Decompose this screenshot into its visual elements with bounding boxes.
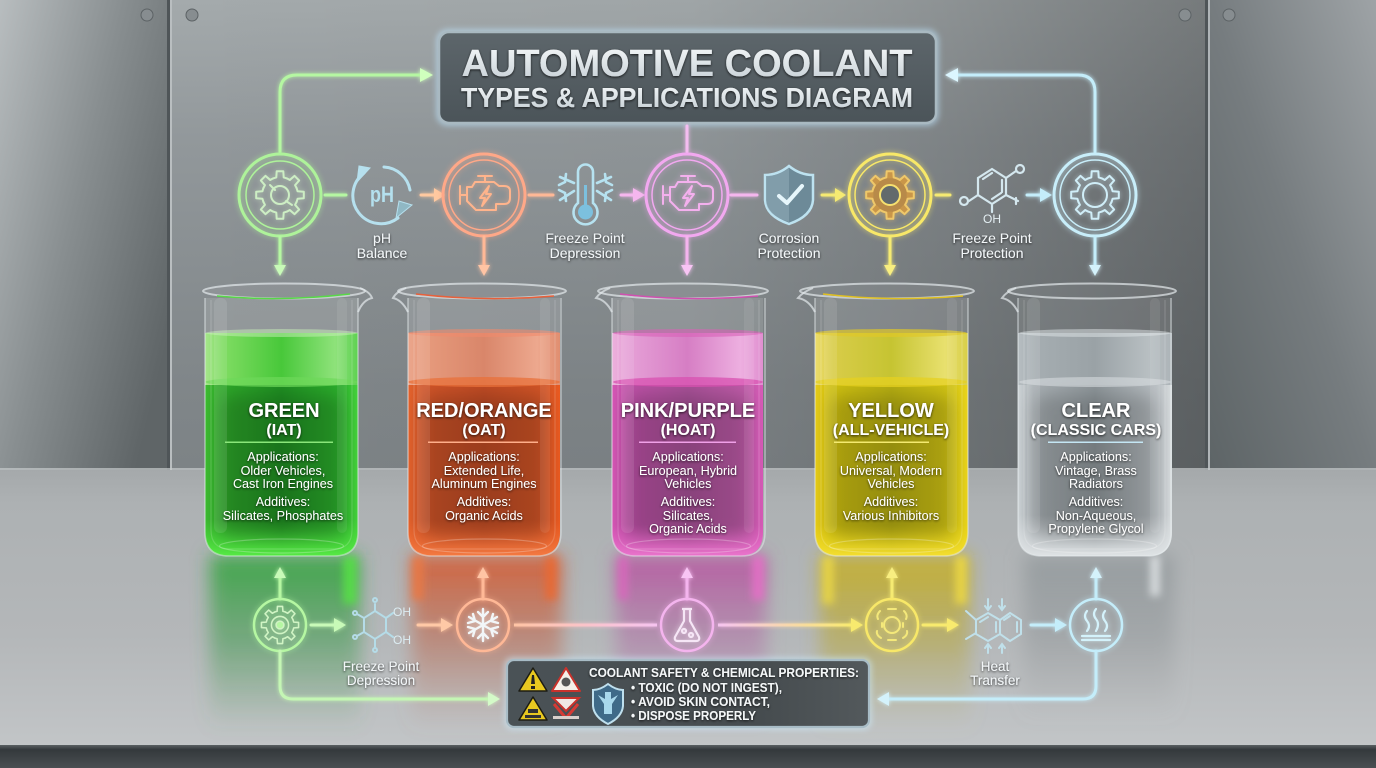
icon: yellow corrosive triangle — [519, 697, 547, 720]
icon: yellow warning exclamation — [519, 668, 547, 691]
label: heat transfer: Transfer — [970, 673, 1020, 688]
lower liquid — [205, 385, 358, 556]
icon: shield with figure — [593, 684, 623, 724]
text: red/orange label: Organic Acids — [445, 509, 523, 523]
label: freeze point depression bottom: Freeze Point — [343, 659, 420, 674]
label: corrosion protection: Corrosion — [759, 230, 819, 246]
text: green label: Cast Iron Engines — [233, 477, 333, 491]
node: bottom green gear — [254, 599, 306, 651]
arrow: yellow to naphthalene — [923, 618, 959, 632]
icon: molecule with OH — [960, 165, 1024, 226]
text: clear label: Non-Aqueous, — [1056, 509, 1136, 523]
arrow: blue node to safety panel — [877, 651, 1096, 706]
arrow: molecule to snowflake — [418, 618, 453, 632]
icon: molecule freeze depression: OH — [393, 605, 411, 619]
text: red/orange label: RED/ORANGE — [416, 400, 552, 422]
beaker: yellow all-vehicle — [798, 284, 974, 556]
icon: molecule freeze depression: OH — [393, 633, 411, 647]
text: green label: Additives: — [256, 495, 310, 509]
text: yellow label: Universal, Modern — [840, 464, 942, 478]
connector: orange to thermometer — [529, 194, 553, 196]
icon: shield with check — [765, 166, 813, 224]
text: yellow label — [833, 400, 949, 523]
icon: thermometer with snowflakes — [559, 164, 612, 224]
icon: molecule with OH: OH — [983, 212, 1001, 226]
label: pH balance: Balance — [357, 245, 408, 261]
arrow: green node to title — [280, 68, 433, 152]
node: heat waves — [1070, 599, 1122, 651]
connector: pink node to title — [686, 126, 688, 152]
label: freeze point protection — [952, 230, 1032, 261]
text: yellow label: Additives: — [864, 495, 918, 509]
upper liquid — [815, 333, 968, 385]
label: pH balance: pH — [373, 230, 391, 246]
text: pink/purple label: European, Hybrid — [639, 464, 737, 478]
beaker: green IAT — [203, 284, 372, 556]
label: freeze point depression: Depression — [550, 245, 620, 261]
text: pink/purple label: PINK/PURPLE — [621, 400, 755, 422]
text: red/orange label: Aluminum Engines — [432, 477, 536, 491]
node: orange engine — [443, 154, 525, 236]
node: flask — [661, 599, 713, 651]
text: green label — [223, 400, 343, 523]
text: green label: Silicates, Phosphates — [223, 509, 343, 523]
label: freeze point protection: Protection — [960, 245, 1024, 261]
label: heat transfer: Heat — [981, 659, 1009, 674]
node: blue gear — [1054, 154, 1136, 236]
node: snowflake — [457, 599, 509, 651]
icon: naphthalene heat transfer — [966, 599, 1021, 653]
node: yellow gear — [849, 154, 931, 236]
label: freeze point depression bottom: Depression — [347, 673, 415, 688]
label: corrosion protection: Protection — [757, 245, 821, 261]
beaker: red/orange OAT — [393, 284, 566, 556]
text: pink/purple label: (HOAT) — [661, 422, 715, 439]
beaker: pink/purple HOAT — [596, 284, 768, 556]
text: yellow label: (ALL-VEHICLE) — [833, 422, 949, 439]
text: clear label: Radiators — [1069, 477, 1123, 491]
arrow: blue node to title — [945, 68, 1095, 152]
title line 2: TYPES & APPLICATIONS DIAGRAM — [461, 82, 913, 113]
upper liquid — [408, 333, 560, 385]
text: pink/purple label — [621, 400, 755, 536]
text: yellow label: Various Inhibitors — [843, 509, 939, 523]
lower liquid — [612, 385, 763, 556]
upper liquid — [612, 333, 763, 385]
connector: green to pH — [325, 194, 346, 196]
text: green label: Applications: — [247, 450, 319, 464]
arrow: green node to safety panel — [280, 651, 500, 706]
safety panel — [504, 657, 872, 730]
lower liquid — [1018, 385, 1172, 556]
node: green gear — [239, 154, 321, 236]
text: pink/purple label: Silicates, — [663, 509, 713, 523]
label: corrosion protection — [757, 230, 821, 261]
arrow: green to molecule — [311, 618, 346, 632]
text: clear label — [1031, 400, 1161, 536]
arrows: bottom nodes up to beakers — [274, 567, 1102, 599]
icon: red pollution symbol — [553, 698, 579, 719]
icon: pH balance cycle — [353, 166, 412, 224]
connector: snowflake to flask — [514, 624, 657, 626]
label: freeze point depression bottom — [343, 659, 420, 688]
arrow: molecule to blue — [1027, 188, 1052, 202]
arrow: naphthalene to heat node — [1031, 618, 1067, 632]
lower liquid — [408, 385, 560, 556]
text: clear label: Propylene Glycol — [1048, 522, 1144, 536]
table reflections of the beakers — [210, 555, 1174, 730]
text: red/orange label: Additives: — [457, 495, 511, 509]
text: pink/purple label: Applications: — [652, 450, 724, 464]
text: red/orange label: Extended Life, — [444, 464, 524, 478]
text: pink/purple label: Additives: — [661, 495, 715, 509]
label: pH balance — [357, 230, 408, 261]
text: clear label: Applications: — [1060, 450, 1132, 464]
connector: pink to shield — [731, 194, 757, 196]
arrow: pH to orange — [421, 188, 445, 202]
safety text — [589, 666, 859, 723]
beaker: clear classic cars — [1002, 284, 1176, 556]
text: yellow label: YELLOW — [848, 400, 934, 422]
label: freeze point protection: Freeze Point — [952, 230, 1032, 246]
safety text: COOLANT SAFETY & CHEMICAL PROPERTIES: — [589, 666, 859, 680]
node: bottom yellow gear — [866, 599, 918, 651]
steel table surface — [0, 468, 1376, 768]
text: clear label: (CLASSIC CARS) — [1031, 422, 1161, 439]
title line 1: AUTOMOTIVE COOLANT — [462, 43, 912, 85]
icon: pH balance cycle: pH — [370, 182, 394, 207]
arrow: shield to yellow — [822, 188, 846, 202]
text: red/orange label: Applications: — [448, 450, 520, 464]
text: clear label: CLEAR — [1062, 400, 1131, 422]
label: freeze point depression: Freeze Point — [545, 230, 625, 246]
safety text: • DISPOSE PROPERLY — [631, 709, 757, 723]
label: freeze point depression — [545, 230, 625, 261]
title plate — [436, 29, 939, 126]
text: pink/purple label: Organic Acids — [649, 522, 727, 536]
text: yellow label: Vehicles — [868, 477, 914, 491]
node: pink engine — [646, 154, 728, 236]
text: clear label: Vintage, Brass — [1055, 464, 1137, 478]
label: heat transfer — [970, 659, 1020, 688]
upper liquid — [1018, 333, 1172, 385]
arrow: flask to yellow — [718, 618, 863, 632]
lower liquid — [815, 385, 968, 556]
text: green label: GREEN — [248, 400, 320, 422]
text: green label: Older Vehicles, — [241, 464, 325, 478]
text: yellow label: Applications: — [855, 450, 927, 464]
safety text: • TOXIC (DO NOT INGEST), — [631, 681, 782, 695]
arrows: nodes down to beakers — [274, 237, 1101, 276]
text: green label: (IAT) — [266, 422, 302, 439]
icon: red hazard triangle — [552, 668, 580, 691]
arrow: thermometer to pink — [621, 188, 645, 202]
upper liquid — [205, 333, 358, 385]
text: pink/purple label: Vehicles — [665, 477, 711, 491]
icon: molecule freeze depression — [353, 598, 411, 652]
connector: yellow to molecule — [936, 194, 950, 196]
safety text: • AVOID SKIN CONTACT, — [631, 695, 770, 709]
bright streaks in the reflections — [343, 556, 1160, 604]
text: clear label: Additives: — [1069, 495, 1123, 509]
text: red/orange label: (OAT) — [462, 422, 506, 439]
text: red/orange label — [416, 400, 552, 523]
